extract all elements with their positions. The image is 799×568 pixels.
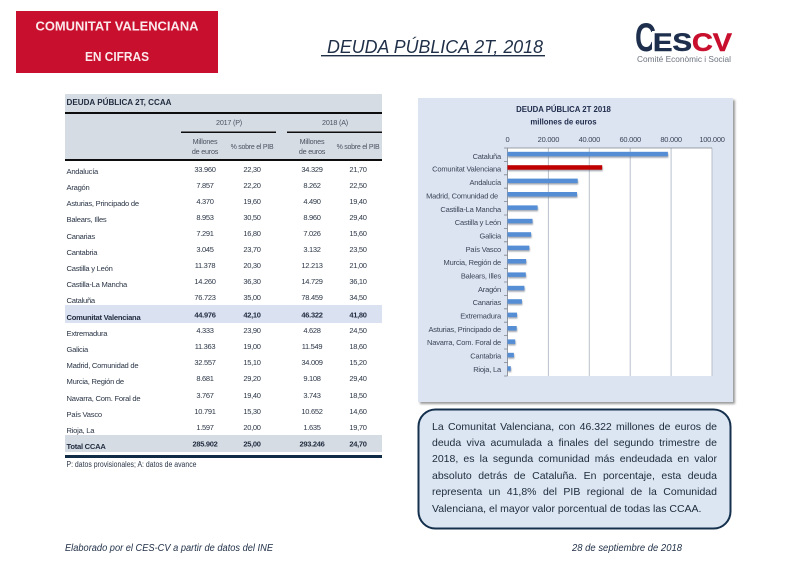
category labels: Cataluña [473, 152, 502, 161]
row: Aragón [66, 181, 367, 192]
row: Castilla-La Mancha: 36,10 [349, 277, 367, 286]
title: DEUDA PÚBLICA 2T, 2018 [327, 36, 543, 57]
row: Comunitat Valenciana (highlighted) [65, 305, 382, 323]
row: Castilla-La Mancha: 14.729 [301, 277, 323, 286]
logo: CES-CV: ES [653, 29, 692, 57]
table title band: DEUDA PÚBLICA 2T, CCAA [66, 96, 172, 107]
category labels: Castilla-La Mancha [440, 205, 502, 214]
panel: red title badge [16, 11, 218, 73]
panel: red title badge: COMUNITAT VALENCIANA [36, 18, 199, 34]
row: Madrid: 34.009 [301, 358, 323, 367]
row: Galicia: 11.363 [195, 342, 215, 351]
row: Rioja: 20,00 [243, 423, 261, 432]
category labels: País Vasco [466, 245, 501, 254]
row: Galicia: 19,00 [243, 342, 261, 351]
row: Navarra: 3.743 [303, 391, 321, 400]
row: Asturias: 19,40 [349, 197, 367, 206]
row: Galicia: 11.549 [302, 342, 322, 351]
row: Cantabria: 3.045 [196, 245, 214, 254]
row: Navarra: 18,50 [349, 391, 367, 400]
category labels: Navarra, Com. Foral de [427, 338, 501, 347]
row: Aragón: 8.262 [303, 181, 321, 190]
bars [508, 152, 668, 371]
category labels: Rioja, La [473, 365, 502, 374]
callout: summary text [418, 410, 730, 528]
row: Balears: Balears, Illes [66, 215, 107, 224]
row: Extremadura: 24,50 [349, 326, 367, 335]
row: Navarra: Navarra, Com. Foral de [66, 394, 140, 403]
row: Comunitat Valenciana (highlighted): Comunitat Valenciana [66, 313, 141, 322]
x axis labels: 0 [506, 135, 510, 144]
row: Balears: 8.953 [196, 213, 214, 222]
table footnote: P: datos provisionales; A: datos de avance [66, 460, 196, 469]
row: Extremadura: Extremadura [66, 329, 108, 338]
row: País Vasco: País Vasco [66, 410, 102, 419]
x axis labels: 60.000 [619, 135, 641, 144]
row: Madrid: 15,20 [349, 358, 367, 367]
table header: Millones [300, 137, 325, 146]
row: Cataluña: 76.723 [194, 293, 216, 302]
row: Castilla-La Mancha: 36,30 [243, 277, 261, 286]
row: Cantabria: Cantabria [66, 248, 98, 257]
callout: summary text: Valenciana, el mayor valor porcentual de todas las CCAA. [432, 503, 701, 515]
table header: % sobre el PIB [337, 144, 380, 151]
chart title: millones de euros [530, 118, 597, 126]
row: Andalucía: Andalucía [66, 167, 99, 176]
x axis labels [506, 135, 725, 144]
row: Balears: 30,50 [243, 213, 261, 222]
row: Andalucía [66, 165, 367, 176]
row: Extremadura [66, 326, 367, 338]
footer: source note: Elaborado por el CES-CV a partir de datos del INE [65, 543, 273, 554]
row: Andalucía: 21,70 [349, 165, 367, 174]
category labels: Canarias [473, 298, 501, 307]
row: Rioja: Rioja, La [66, 426, 95, 435]
row: Total CCAA: 285.902 [192, 440, 218, 448]
row: Madrid: 15,10 [243, 358, 261, 367]
panel: bar chart [418, 98, 735, 404]
row: Rioja: 1.597 [196, 423, 214, 432]
row: Aragón: 22,20 [243, 181, 261, 190]
callout: summary text: representa un 41,8% del PIB regional de la Comunidad [432, 486, 717, 498]
category labels: Madrid, Comunidad de [426, 192, 498, 200]
category labels: Andalucía [469, 178, 502, 187]
category labels: Asturias, Principado de [428, 325, 501, 334]
row: País Vasco: 14,60 [349, 407, 367, 416]
row: Balears: 29,40 [349, 213, 367, 222]
row: Murcia: 29,40 [349, 374, 367, 383]
category labels: Murcia, Región de [444, 258, 501, 267]
table header: % sobre el PIB [231, 144, 274, 151]
row: Balears [66, 213, 367, 224]
row: Andalucía: 33.960 [194, 165, 216, 174]
row: Aragón: 7.857 [196, 181, 214, 190]
row: Cataluña: 35,00 [243, 293, 261, 302]
row: País Vasco [66, 407, 367, 419]
footer: date: 28 de septiembre de 2018 [571, 543, 682, 554]
row: Comunitat Valenciana (highlighted): 44.976 [194, 310, 216, 320]
row: Canarias [66, 229, 367, 241]
row: Andalucía: 34.329 [301, 165, 323, 174]
row: Castilla y León: 20,30 [243, 261, 261, 270]
row: Canarias: 7.026 [303, 229, 321, 238]
row: Asturias [66, 197, 367, 208]
row: Rioja: 19,70 [349, 423, 367, 432]
row: Cantabria: 23,70 [243, 245, 261, 254]
row: Murcia: 29,20 [243, 374, 261, 383]
table title band [65, 94, 382, 112]
table header: 2017 (P) [216, 118, 242, 127]
table header: de euros [192, 147, 219, 156]
row: Total CCAA: 293.246 [299, 440, 325, 448]
row: Galicia: 18,60 [349, 342, 367, 351]
row: Andalucía: 22,30 [243, 165, 261, 174]
category labels: Galicia [479, 232, 502, 240]
chart title: DEUDA PÚBLICA 2T 2018 [516, 105, 612, 114]
row: Asturias: 4.370 [196, 197, 214, 206]
row: Castilla y León: 11.378 [195, 261, 215, 270]
row: Canarias: Canarias [66, 232, 95, 241]
table header: Millones [193, 137, 218, 146]
row: Rioja: 1.635 [303, 423, 321, 432]
callout: summary text: La Comunitat Valenciana, con 46.322 millones de euros de [432, 420, 717, 432]
row: Cataluña: Cataluña [66, 296, 96, 305]
bar shadows [508, 153, 668, 372]
row: Castilla-La Mancha: 14.260 [194, 277, 216, 286]
row: Canarias: 15,60 [349, 229, 367, 238]
row: Comunitat Valenciana (highlighted): 46.322 [301, 310, 323, 320]
row: Navarra [66, 391, 367, 403]
row: Aragón: 22,50 [349, 181, 367, 190]
category labels [426, 152, 502, 374]
row: Aragón: Aragón [66, 183, 90, 192]
row: Madrid: Madrid, Comunidad de [66, 361, 138, 370]
table header [65, 112, 382, 161]
row: Total CCAA: Total CCAA [66, 442, 106, 451]
row: País Vasco: 10.791 [194, 407, 216, 416]
row: Castilla y León: Castilla y León [66, 264, 113, 273]
row: Navarra: 19,40 [243, 391, 261, 400]
callout: summary text: absoluto detrás de Cataluña. En porcentaje, esta deuda [432, 470, 717, 482]
category labels: Extremadura [460, 312, 502, 320]
row: Madrid [66, 358, 367, 370]
row: Murcia [66, 374, 367, 386]
row: Extremadura: 4.333 [196, 326, 214, 335]
chart title [516, 105, 612, 126]
category labels: Castilla y León [455, 218, 501, 227]
row: Balears: 8.960 [303, 213, 321, 222]
x axis labels: 80.000 [660, 135, 682, 144]
row: Canarias: 16,80 [243, 229, 261, 238]
row: Total CCAA: 25,00 [243, 440, 261, 448]
x axis labels: 20.000 [538, 135, 559, 144]
row: Rioja [66, 423, 367, 435]
row: Cataluña: 34,50 [349, 293, 367, 302]
row: Murcia: 8.681 [196, 374, 214, 383]
row: Extremadura: 4.628 [303, 326, 321, 335]
x axis labels: 100.000 [699, 135, 725, 144]
row: Castilla-La Mancha: Castilla-La Mancha [66, 280, 128, 289]
category labels: Aragón [478, 285, 501, 294]
x axis labels: 40.000 [579, 135, 600, 144]
row: Total CCAA [65, 435, 382, 452]
panel: red title badge: EN CIFRAS [85, 49, 149, 64]
row: Cantabria: 23,50 [349, 245, 367, 254]
callout: summary text: 2018, es la segunda comunidad más endeudada en valor [432, 453, 717, 465]
row: Comunitat Valenciana (highlighted): 41,80 [349, 310, 367, 320]
row: Cantabria [66, 245, 367, 257]
logo: CES-CV: C [635, 16, 656, 60]
row: Cataluña: 78.459 [301, 293, 323, 302]
row: Castilla y León: 12.213 [301, 261, 323, 270]
row: Total CCAA: 24,70 [349, 440, 367, 448]
category labels: Balears, Illes [461, 272, 501, 280]
row: Castilla-La Mancha [66, 277, 367, 289]
row: Cataluña [66, 293, 367, 305]
row: País Vasco: 10.652 [301, 407, 323, 416]
callout: summary text: deuda viva acumulada a finales del segundo trimestre de [432, 437, 717, 449]
row: Cantabria: 3.132 [303, 245, 321, 254]
row: Madrid: 32.557 [194, 358, 216, 367]
row: Asturias: 4.490 [303, 197, 321, 206]
row: Comunitat Valenciana (highlighted): 42,10 [243, 310, 261, 320]
row: Murcia: Murcia, Región de [66, 377, 124, 386]
row: País Vasco: 15,30 [243, 407, 261, 416]
row: Asturias: Asturias, Principado de [66, 199, 139, 208]
row: Galicia [66, 342, 367, 354]
row: Castilla y León: 21,00 [349, 261, 367, 270]
row: Extremadura: 23,90 [243, 326, 261, 335]
plot area [504, 148, 712, 376]
logo: CES-CV: CV [692, 29, 732, 57]
logo: CES-CV [635, 16, 732, 64]
category labels: Cantabria [470, 352, 502, 360]
row: Navarra: 3.767 [196, 391, 214, 400]
row: Galicia: Galicia [66, 345, 89, 354]
row: Canarias: 7.291 [196, 229, 214, 238]
row: Castilla y León [66, 261, 367, 273]
row: Asturias: 19,60 [243, 197, 261, 206]
logo: CES-CV: Comité Econòmic i Social [637, 54, 731, 64]
row: Murcia: 9.108 [303, 374, 321, 383]
table header: de euros [299, 147, 326, 156]
category labels: Comunitat Valenciana [432, 164, 502, 174]
panel: data table [65, 94, 382, 469]
table header: 2018 (A) [322, 118, 348, 127]
